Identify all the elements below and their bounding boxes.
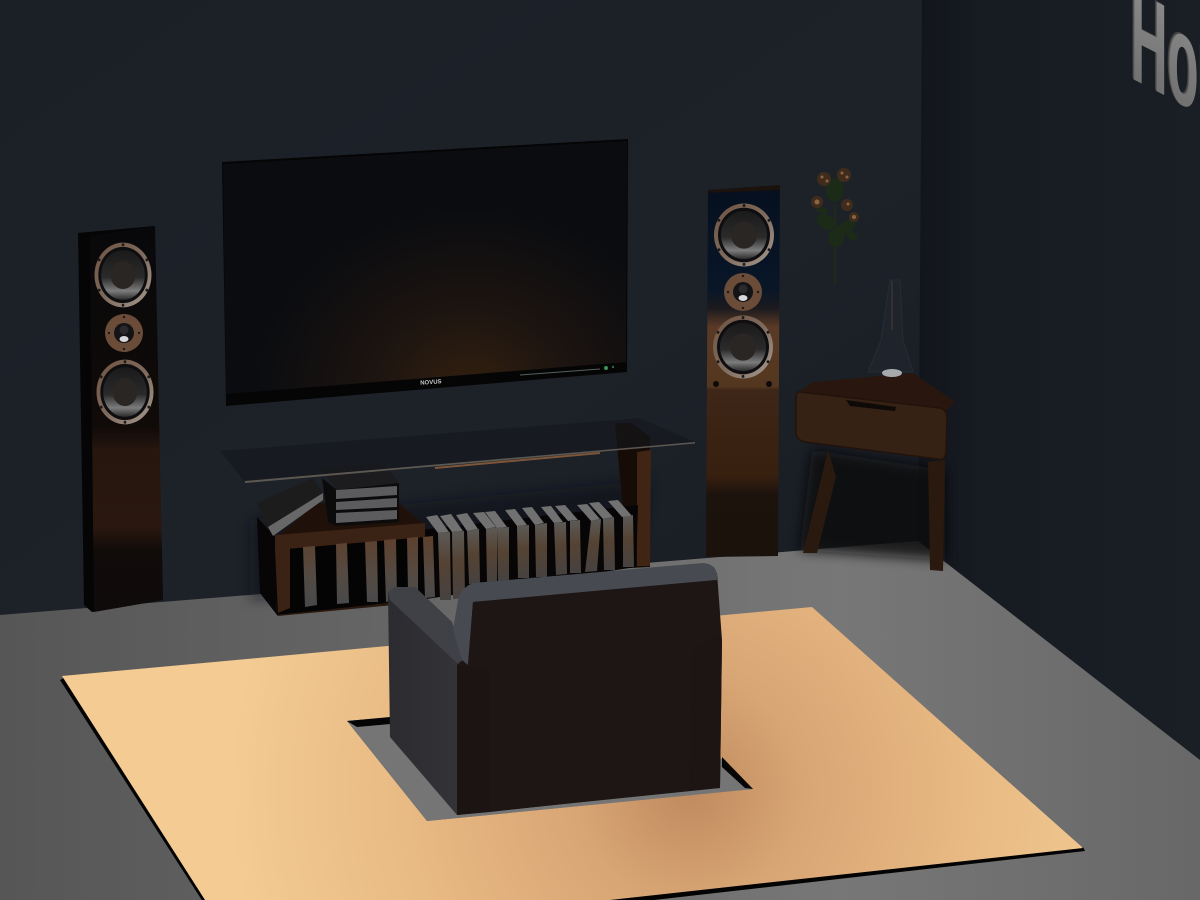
chair base fill xyxy=(453,573,722,815)
table legs xyxy=(803,450,945,571)
port holes xyxy=(713,381,772,387)
wooden crate with books xyxy=(257,502,435,616)
woofer top xyxy=(714,204,774,266)
rug opening shadow xyxy=(347,717,390,727)
leaning book xyxy=(257,478,323,536)
floor xyxy=(0,541,1200,900)
left arm side xyxy=(388,587,463,815)
stack of books on crate xyxy=(257,462,399,536)
corner side table xyxy=(796,369,955,571)
TV brand label: NOVUS xyxy=(420,379,442,387)
left tower speaker xyxy=(78,226,163,612)
table top xyxy=(797,373,955,410)
table shadow xyxy=(800,450,945,560)
book top edges xyxy=(426,500,632,533)
floor visible through opening xyxy=(347,695,753,821)
left arm top xyxy=(388,587,463,663)
TV status light bar xyxy=(520,366,614,375)
right console leg xyxy=(615,423,651,568)
table drawer xyxy=(796,392,947,459)
glass console top xyxy=(220,418,695,483)
dish on table xyxy=(882,369,902,377)
back top cushion xyxy=(453,563,717,665)
armchair xyxy=(388,563,722,815)
glass vase xyxy=(868,280,913,372)
tweeter xyxy=(105,314,143,352)
woofer bottom xyxy=(96,360,154,424)
tweeter xyxy=(724,273,762,311)
rug xyxy=(60,607,1085,900)
woofer top xyxy=(94,243,152,307)
console shadow xyxy=(250,480,650,600)
television xyxy=(222,139,628,406)
right arm xyxy=(690,633,722,790)
rug surface with square opening xyxy=(62,607,1083,900)
drawer handle xyxy=(846,400,896,411)
row of books xyxy=(420,500,638,600)
wall plant xyxy=(811,168,859,284)
left front post xyxy=(457,665,490,815)
rug shadow xyxy=(60,678,1085,900)
book spines xyxy=(438,515,634,600)
back panel xyxy=(468,580,717,732)
right tower speaker xyxy=(706,185,780,557)
back wall xyxy=(0,0,925,620)
seat lower front xyxy=(490,713,690,812)
woofer bottom xyxy=(713,316,773,378)
right wall xyxy=(918,0,1200,765)
